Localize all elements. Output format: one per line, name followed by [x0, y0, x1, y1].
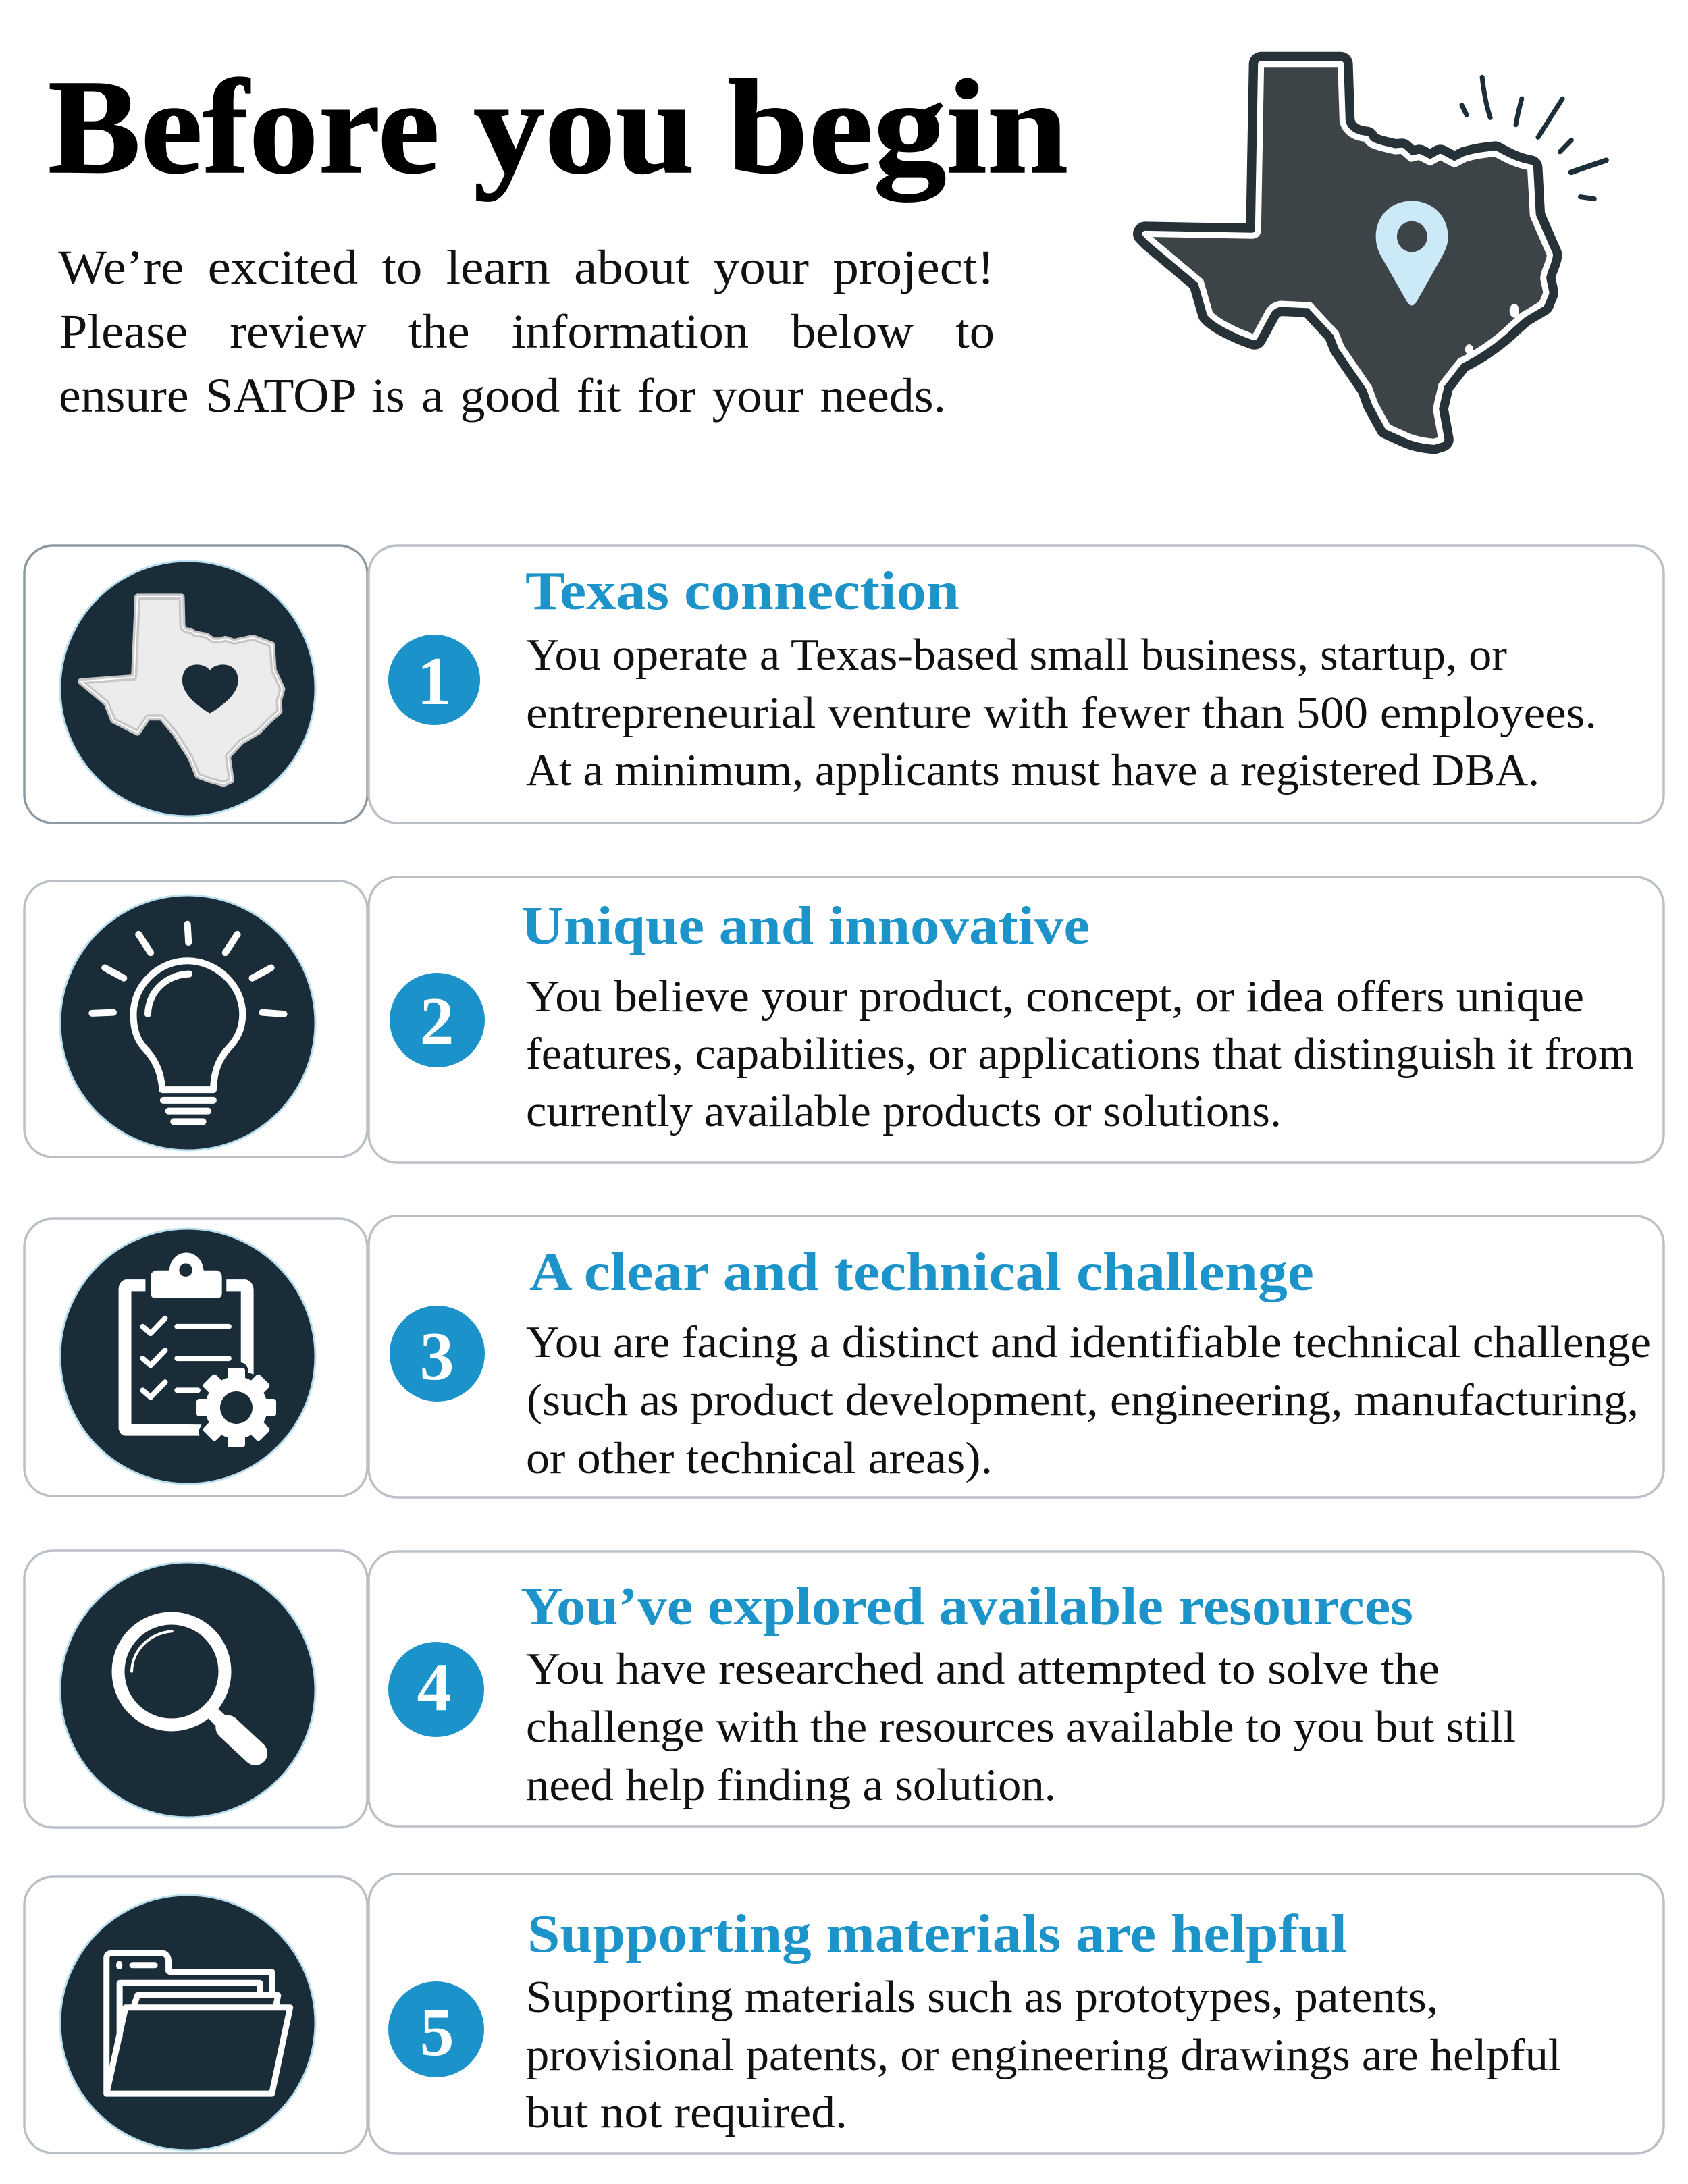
- text panel 4: [369, 1551, 1664, 1826]
- intro text: We’re excited to learn about your project!: [58, 240, 995, 294]
- body 5: but not required.: [526, 2087, 847, 2137]
- body 5: [526, 1972, 1561, 2137]
- heading 4: You’ve explored available resources: [521, 1577, 1413, 1636]
- icon: clipboard with gear: [60, 1229, 315, 1484]
- number badge 1: 1: [417, 643, 451, 720]
- row 2: Unique and innovative: [24, 877, 1664, 1163]
- body 4: You have researched and attempted to solve the: [526, 1644, 1440, 1694]
- body 3: (such as product development, engineering, manufacturing,: [527, 1375, 1639, 1425]
- intro text: ensure SATOP is a good fit for your needs.: [59, 369, 946, 423]
- body 2: features, capabilities, or applications that distinguish it from: [526, 1029, 1634, 1079]
- body 1: At a minimum, applicants must have a registered DBA.: [526, 745, 1539, 795]
- intro text: [58, 240, 995, 423]
- title: Before: [48, 53, 440, 202]
- icon: Texas with heart: [60, 561, 315, 816]
- number badge 3: [390, 1306, 485, 1402]
- heading 2: Unique and innovative: [521, 897, 1090, 956]
- number badge 4: [388, 1642, 484, 1737]
- number badge 4: 4: [417, 1649, 451, 1726]
- icon panel 1: [24, 545, 367, 823]
- body 3: You are facing a distinct and identifiable technical challenge: [526, 1317, 1651, 1367]
- icon: magnifying glass: [60, 1562, 315, 1817]
- body 4: need help finding a solution.: [526, 1760, 1056, 1810]
- text panel 5: [369, 1874, 1664, 2154]
- body 5: provisional patents, or engineering drawings are helpful: [526, 2030, 1561, 2080]
- location pin: [1376, 201, 1448, 305]
- number badge 1: [388, 635, 480, 725]
- body 1: You operate a Texas-based small business, startup, or: [526, 630, 1507, 680]
- heading 1: Texas connection: [525, 562, 959, 621]
- body 5: Supporting materials such as prototypes, patents,: [526, 1972, 1438, 2022]
- heading 3: A clear and technical challenge: [529, 1243, 1314, 1302]
- radiating lines: [1462, 77, 1606, 199]
- row 4: You've explored available resources: [24, 1551, 1664, 1828]
- text panel 3: [369, 1216, 1664, 1497]
- intro text: Please review the information below to: [59, 304, 995, 358]
- text panel 1: [369, 545, 1664, 823]
- icon: file folder: [60, 1895, 315, 2150]
- icon panel 5: [24, 1877, 367, 2153]
- body 3: or other technical areas).: [526, 1433, 993, 1483]
- body 1: entrepreneurial venture with fewer than 500 employees.: [526, 688, 1597, 738]
- row 3: A clear and technical challenge: [24, 1216, 1664, 1497]
- icon panel 3: [24, 1219, 367, 1496]
- icon panel 2: [24, 881, 367, 1157]
- title: you: [473, 53, 695, 202]
- body 2: You believe your product, concept, or idea offers unique: [526, 971, 1584, 1021]
- text panel 2: [369, 877, 1664, 1163]
- heading 5: Supporting materials are helpful: [527, 1905, 1347, 1964]
- icon: Texas map with location pin: [1145, 64, 1606, 442]
- Texas outline: [1145, 64, 1550, 442]
- body 4: challenge with the resources available to you but still: [526, 1702, 1516, 1752]
- body 1: [526, 630, 1597, 795]
- icon panel 4: [24, 1551, 367, 1828]
- row 1: Texas connection: [24, 545, 1664, 823]
- body 3: [526, 1317, 1651, 1483]
- number badge 2: 2: [420, 984, 454, 1060]
- row 5: Supporting materials are helpful: [24, 1874, 1664, 2154]
- number badge 5: [388, 1981, 484, 2077]
- title: [48, 53, 1068, 202]
- number badge 3: 3: [420, 1319, 454, 1395]
- number badge 2: [390, 973, 485, 1067]
- number badge 5: 5: [420, 1994, 454, 2071]
- title: begin: [727, 53, 1068, 202]
- body 2: currently available products or solutions.: [526, 1086, 1282, 1136]
- icon: light bulb: [60, 895, 315, 1150]
- body 2: [526, 971, 1634, 1136]
- body 4: [526, 1644, 1516, 1810]
